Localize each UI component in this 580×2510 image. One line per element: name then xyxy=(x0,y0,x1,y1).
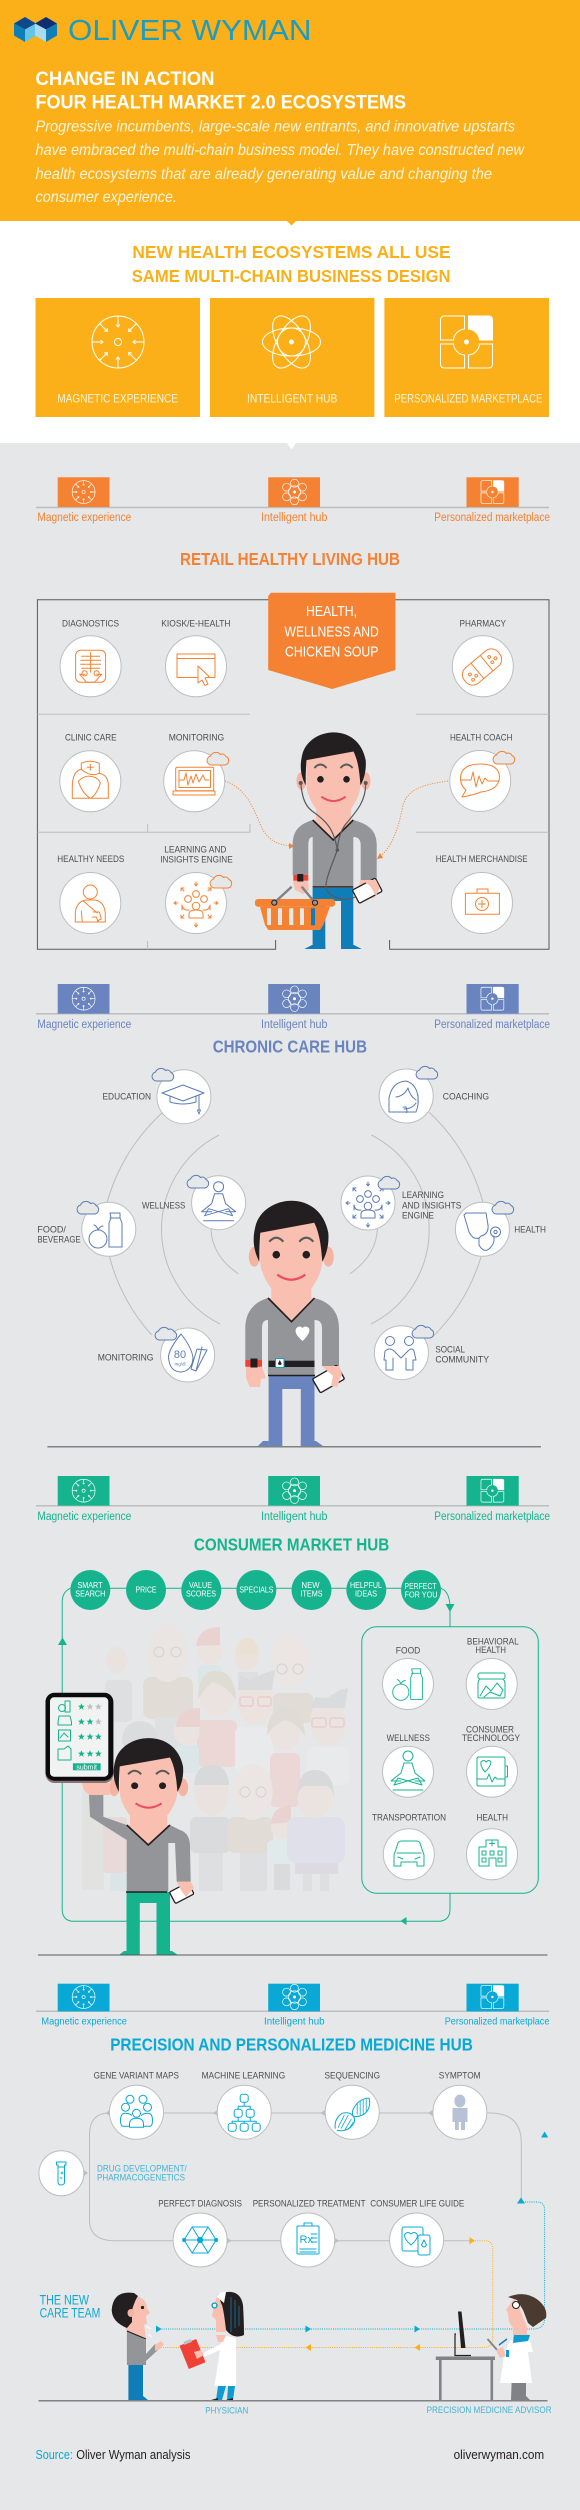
precision item: symptom xyxy=(433,2071,487,2139)
category: behavioral health xyxy=(466,1637,519,1710)
intro paragraph: health ecosystems that are already generating value and changing the xyxy=(36,166,492,183)
category: behavioral health: BEHAVIORAL xyxy=(467,1637,519,1648)
pathway line xyxy=(84,2110,521,2244)
source line xyxy=(36,2448,190,2462)
card: intelligent hub xyxy=(210,298,374,417)
filter pills xyxy=(70,1570,441,1610)
chronic item: monitoring xyxy=(98,1327,215,1382)
role labels: PRECISION MEDICINE ADVISOR xyxy=(427,2405,552,2416)
retail item: clinic care xyxy=(60,732,121,812)
precision item: perfect diagnosis: PERFECT DIAGNOSIS xyxy=(158,2198,242,2209)
person: consumer with tablet xyxy=(46,1693,194,1955)
filter pills: SEARCH xyxy=(75,1588,105,1598)
front row xyxy=(82,1764,345,1891)
dotted connector: monitoring to person xyxy=(225,781,448,856)
precision item: personalized treatment xyxy=(253,2198,366,2267)
chronic item: learning and insights engine: ENGINE xyxy=(402,1210,434,1221)
chronic item: coaching: COACHING xyxy=(443,1092,489,1103)
flow loop line xyxy=(58,1588,454,1925)
banner: health, wellness and chicken soup xyxy=(268,593,396,689)
logo: Oliver Wyman: OLIVER WYMAN xyxy=(68,15,312,47)
chronic item: monitoring: mg/dl xyxy=(174,1362,186,1366)
chronic item: wellness xyxy=(142,1175,246,1230)
retail item: health merchandise xyxy=(436,854,528,934)
filter pills: ITEMS xyxy=(300,1588,323,1598)
basket xyxy=(255,887,335,930)
precision item: personalized treatment: Rx xyxy=(300,2234,313,2246)
chronic item: monitoring: 80 xyxy=(174,1349,186,1361)
ground line: precision xyxy=(38,2400,548,2402)
precision item: drug development: DRUG DEVELOPMENT/ xyxy=(97,2163,187,2174)
intro paragraph: have embraced the multi-chain business model. They have constructed new xyxy=(36,142,525,159)
category: food xyxy=(382,1646,434,1710)
retail item: monitoring: MONITORING xyxy=(169,732,224,743)
card: intelligent hub: INTELLIGENT HUB xyxy=(247,392,337,406)
legend strip: consumer xyxy=(36,1476,550,1523)
category: health: HEALTH xyxy=(476,1813,508,1824)
connecting arcs xyxy=(107,1112,483,1337)
filter pills: PRICE xyxy=(136,1584,157,1594)
legend strip: precision: Personalized marketplace xyxy=(445,2016,550,2028)
legend strip: retail: Magnetic experience xyxy=(37,512,131,524)
legend strip: consumer: Magnetic experience xyxy=(37,1511,131,1523)
precision item: machine learning xyxy=(202,2071,285,2139)
precision item: gene variant maps xyxy=(94,2071,179,2139)
chronic item: coaching xyxy=(379,1066,489,1123)
person: chronic care patient xyxy=(245,1201,345,1446)
chronic item: education: EDUCATION xyxy=(102,1092,151,1103)
retail item: health coach: HEALTH COACH xyxy=(450,732,513,743)
chronic item: health xyxy=(455,1201,546,1256)
filter pills: FOR YOU xyxy=(404,1590,438,1600)
chronic item: learning and insights engine: AND INSIGHTS xyxy=(402,1200,461,1211)
card: personalized marketplace xyxy=(384,298,549,417)
category: consumer technology: TECHNOLOGY xyxy=(462,1733,521,1744)
panel frame: retail hub xyxy=(37,600,549,949)
precision item: sequencing: SEQUENCING xyxy=(324,2071,380,2082)
retail item: kiosk xyxy=(161,619,231,697)
category: wellness xyxy=(382,1733,434,1797)
legend strip: precision: Magnetic experience xyxy=(41,2016,127,2028)
legend strip: consumer: Intelligent hub xyxy=(261,1511,327,1523)
legend strip: precision xyxy=(36,1984,550,2028)
heading: SAME MULTI-CHAIN BUSINESS DESIGN xyxy=(132,266,451,286)
label: the new care team: CARE TEAM xyxy=(40,2305,100,2321)
precision item: machine learning: MACHINE LEARNING xyxy=(202,2071,285,2082)
category: wellness: WELLNESS xyxy=(387,1733,430,1744)
precision item: consumer life guide: CONSUMER LIFE GUIDE xyxy=(370,2198,464,2209)
title: FOUR HEALTH MARKET 2.0 ECOSYSTEMS xyxy=(36,92,406,114)
precision item: consumer life guide xyxy=(370,2198,464,2267)
card: magnetic experience: MAGNETIC EXPERIENCE xyxy=(57,392,178,406)
label: the new care team: THE NEW xyxy=(40,2292,90,2308)
filter pills: NEW xyxy=(302,1580,320,1590)
retail item: learning and insights engine: INSIGHTS ENGINE xyxy=(160,855,233,866)
back row xyxy=(105,1624,313,1757)
legend strip: retail: Personalized marketplace xyxy=(434,512,550,524)
chronic item: food and beverage: BEVERAGE xyxy=(37,1235,81,1246)
category: food: FOOD xyxy=(396,1646,420,1657)
precision item: perfect diagnosis xyxy=(158,2198,242,2267)
retail item: learning and insights engine: LEARNING AND xyxy=(164,845,227,856)
chronic item: wellness: WELLNESS xyxy=(142,1200,185,1211)
precision item: drug development: PHARMACOGENETICS xyxy=(97,2173,185,2184)
category: transportation xyxy=(372,1813,446,1880)
panel: marketplace categories xyxy=(362,1627,538,1893)
legend strip: retail xyxy=(36,477,550,524)
retail item: healthy needs: HEALTHY NEEDS xyxy=(57,854,124,865)
heading: retail healthy living hub: RETAIL HEALTHY LIVING HUB xyxy=(180,549,400,569)
heading: NEW HEALTH ECOSYSTEMS ALL USE xyxy=(132,242,451,262)
heading xyxy=(132,242,451,286)
category: transportation: TRANSPORTATION xyxy=(372,1813,446,1824)
middle row xyxy=(122,1670,350,1807)
filter pills: SMART xyxy=(78,1580,103,1590)
retail item: diagnostics xyxy=(60,619,121,697)
faded crowd of consumers xyxy=(82,1624,350,1891)
precision item: symptom: SYMPTOM xyxy=(439,2071,481,2082)
filter pills: VALUE xyxy=(189,1580,212,1590)
retail item: health merchandise: HEALTH MERCHANDISE xyxy=(436,854,528,865)
legend strip: chronic xyxy=(36,984,550,1031)
intro paragraph xyxy=(36,118,525,206)
retail item: healthy needs xyxy=(57,854,124,934)
source line: Oliver Wyman analysis xyxy=(76,2448,190,2462)
label: the new care team xyxy=(40,2292,100,2321)
chronic item: learning and insights engine xyxy=(341,1176,461,1230)
care team dotted links xyxy=(156,2202,545,2348)
retail item: clinic care: CLINIC CARE xyxy=(65,732,116,743)
person: physician xyxy=(179,2292,244,2401)
role labels: PHYSICIAN xyxy=(205,2405,248,2416)
title xyxy=(36,68,406,114)
arrowheads: dotted connectors xyxy=(289,843,383,859)
banner: health, wellness and chicken soup: WELLNESS AND xyxy=(284,623,379,640)
filter pills: HELPFUL xyxy=(350,1580,382,1590)
legend strip: consumer: Personalized marketplace xyxy=(434,1511,550,1523)
chronic item: education xyxy=(102,1068,211,1124)
ground line: consumer xyxy=(38,1954,548,1956)
title: CHANGE IN ACTION xyxy=(36,68,214,90)
precision item: drug development xyxy=(39,2151,187,2196)
category: health xyxy=(466,1813,518,1880)
filter pills: PERFECT xyxy=(404,1581,437,1591)
precision item: personalized treatment: PERSONALIZED TREATMENT xyxy=(253,2198,366,2209)
white panel: multi-chain design xyxy=(0,221,580,450)
chronic item: social community: COMMUNITY xyxy=(435,1355,490,1366)
chronic item: health: HEALTH xyxy=(514,1224,546,1235)
chronic item: monitoring: MONITORING xyxy=(98,1352,154,1363)
chronic item: food and beverage xyxy=(37,1201,136,1256)
card: personalized marketplace: PERSONALIZED MARKETPLACE xyxy=(394,392,542,406)
card: magnetic experience xyxy=(36,298,200,417)
precision item: gene variant maps: GENE VARIANT MAPS xyxy=(94,2071,179,2082)
source line: Source: xyxy=(36,2448,73,2462)
desk and monitor xyxy=(436,2312,495,2400)
category: consumer technology: CONSUMER xyxy=(466,1725,514,1736)
header banner xyxy=(0,0,580,226)
chronic item: social community xyxy=(374,1325,490,1380)
precision item: sequencing xyxy=(324,2071,380,2139)
chronic item: food and beverage: FOOD/ xyxy=(37,1224,66,1235)
legend strip: chronic: Personalized marketplace xyxy=(434,1019,550,1031)
legend strip: chronic: Intelligent hub xyxy=(261,1019,327,1031)
website: oliverwyman.com xyxy=(454,2448,544,2462)
chronic item: learning and insights engine: LEARNING xyxy=(402,1190,444,1201)
legend strip: precision: Intelligent hub xyxy=(264,2016,325,2028)
banner: health, wellness and chicken soup: CHICKEN SOUP xyxy=(285,644,378,661)
person: patient xyxy=(112,2293,164,2400)
retail item: monitoring xyxy=(164,732,229,812)
retail item: pharmacy: PHARMACY xyxy=(460,619,507,630)
person: retail shopper xyxy=(255,732,382,949)
heading: precision and personalized medicine hub: PRECISION AND PERSONALIZED MEDICINE HUB xyxy=(110,2034,473,2054)
retail item: learning and insights engine xyxy=(160,845,233,934)
filter pills: SPECIALS xyxy=(239,1584,274,1594)
heading: chronic care hub: CHRONIC CARE HUB xyxy=(213,1036,367,1056)
intro paragraph: Progressive incumbents, large-scale new entrants, and innovative upstarts xyxy=(36,118,515,136)
filter pills: IDEAS xyxy=(355,1588,377,1598)
category: consumer technology xyxy=(462,1725,521,1797)
role labels xyxy=(205,2405,552,2416)
retail item: kiosk: KIOSK/E-HEALTH xyxy=(161,619,231,630)
tablet rating screen: submit xyxy=(76,1764,97,1771)
flow arrowheads xyxy=(156,2132,548,2351)
tablet rating screen xyxy=(46,1693,114,1783)
intro paragraph: consumer experience. xyxy=(36,189,177,206)
retail item: health coach xyxy=(450,732,515,812)
legend strip: chronic: Magnetic experience xyxy=(37,1019,131,1031)
category: behavioral health: HEALTH xyxy=(475,1645,506,1656)
ground line: chronic xyxy=(47,1446,541,1448)
heading: consumer market hub: CONSUMER MARKET HUB xyxy=(194,1535,389,1555)
filter pills: SCORES xyxy=(186,1588,216,1598)
retail item: pharmacy xyxy=(452,619,513,697)
banner: health, wellness and chicken soup: HEALTH, xyxy=(306,603,357,620)
chronic item: social community: SOCIAL xyxy=(435,1345,465,1356)
legend strip: retail: Intelligent hub xyxy=(261,512,327,524)
retail item: diagnostics: DIAGNOSTICS xyxy=(62,619,119,630)
person: precision medicine advisor at desk xyxy=(436,2294,546,2400)
